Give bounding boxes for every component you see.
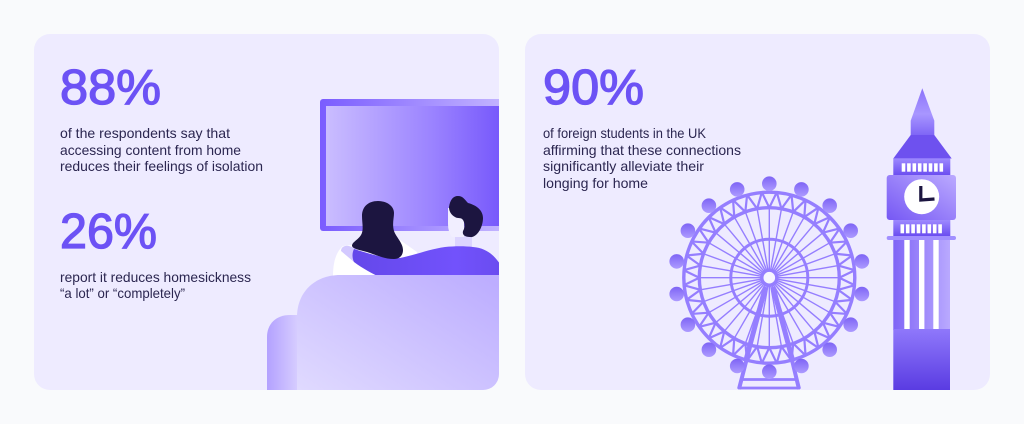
text: homesickness finding: “a lot” or “completely” bbox=[60, 285, 185, 301]
text: foreign students finding: of foreign students in the UK bbox=[543, 125, 707, 141]
panel background right bbox=[525, 34, 990, 390]
icon: man's arm around woman bbox=[352, 246, 499, 275]
text: foreign students finding bbox=[543, 125, 741, 191]
text: foreign students finding: significantly alleviate their bbox=[543, 158, 704, 174]
wheel pods bbox=[669, 176, 869, 379]
lower band with louvres bbox=[893, 220, 950, 236]
tower base bbox=[893, 329, 950, 390]
icon: woman's hand bbox=[341, 246, 358, 262]
panel: content from home bbox=[34, 34, 510, 390]
text: isolation finding: accessing content from home bbox=[60, 142, 241, 158]
wheel rim and spokes bbox=[684, 192, 855, 363]
text: homesickness finding: report it reduces homesickness bbox=[60, 269, 251, 285]
icon: woman's white top bbox=[333, 240, 425, 276]
illustration: couple watching TV on a sofa bbox=[267, 99, 510, 390]
clock housing bbox=[887, 175, 956, 220]
wheel support legs and base bbox=[738, 287, 800, 389]
icon: man's head bbox=[448, 196, 483, 250]
panel: foreign students in the UK bbox=[525, 34, 990, 390]
icon: London Eye bbox=[669, 176, 869, 389]
clock face bbox=[904, 179, 939, 214]
statistic: 26%: 26% bbox=[60, 205, 157, 259]
text: isolation finding bbox=[60, 125, 263, 174]
tower spire bbox=[911, 88, 934, 135]
icon: sofa armrest bbox=[267, 315, 300, 390]
text: foreign students finding: affirming that these connections bbox=[543, 142, 741, 158]
icon: sofa back bbox=[297, 275, 499, 390]
tower shaft with white stripes bbox=[893, 240, 950, 330]
tower roof bbox=[893, 135, 952, 158]
text: foreign students finding: longing for home bbox=[543, 175, 648, 191]
text: isolation finding: reduces their feelings of isolation bbox=[60, 158, 263, 174]
text: homesickness finding bbox=[60, 269, 251, 301]
statistic: 88%: 88% bbox=[60, 61, 161, 115]
icon: television bbox=[320, 99, 510, 231]
icon: Big Ben bbox=[887, 88, 956, 390]
ledge bbox=[887, 236, 956, 240]
panel background left bbox=[34, 34, 499, 390]
icon: woman's hair bbox=[352, 201, 403, 259]
upper band with louvres bbox=[893, 158, 950, 175]
text: isolation finding: of the respondents say that bbox=[60, 125, 230, 141]
statistic: 90%: 90% bbox=[543, 61, 644, 115]
